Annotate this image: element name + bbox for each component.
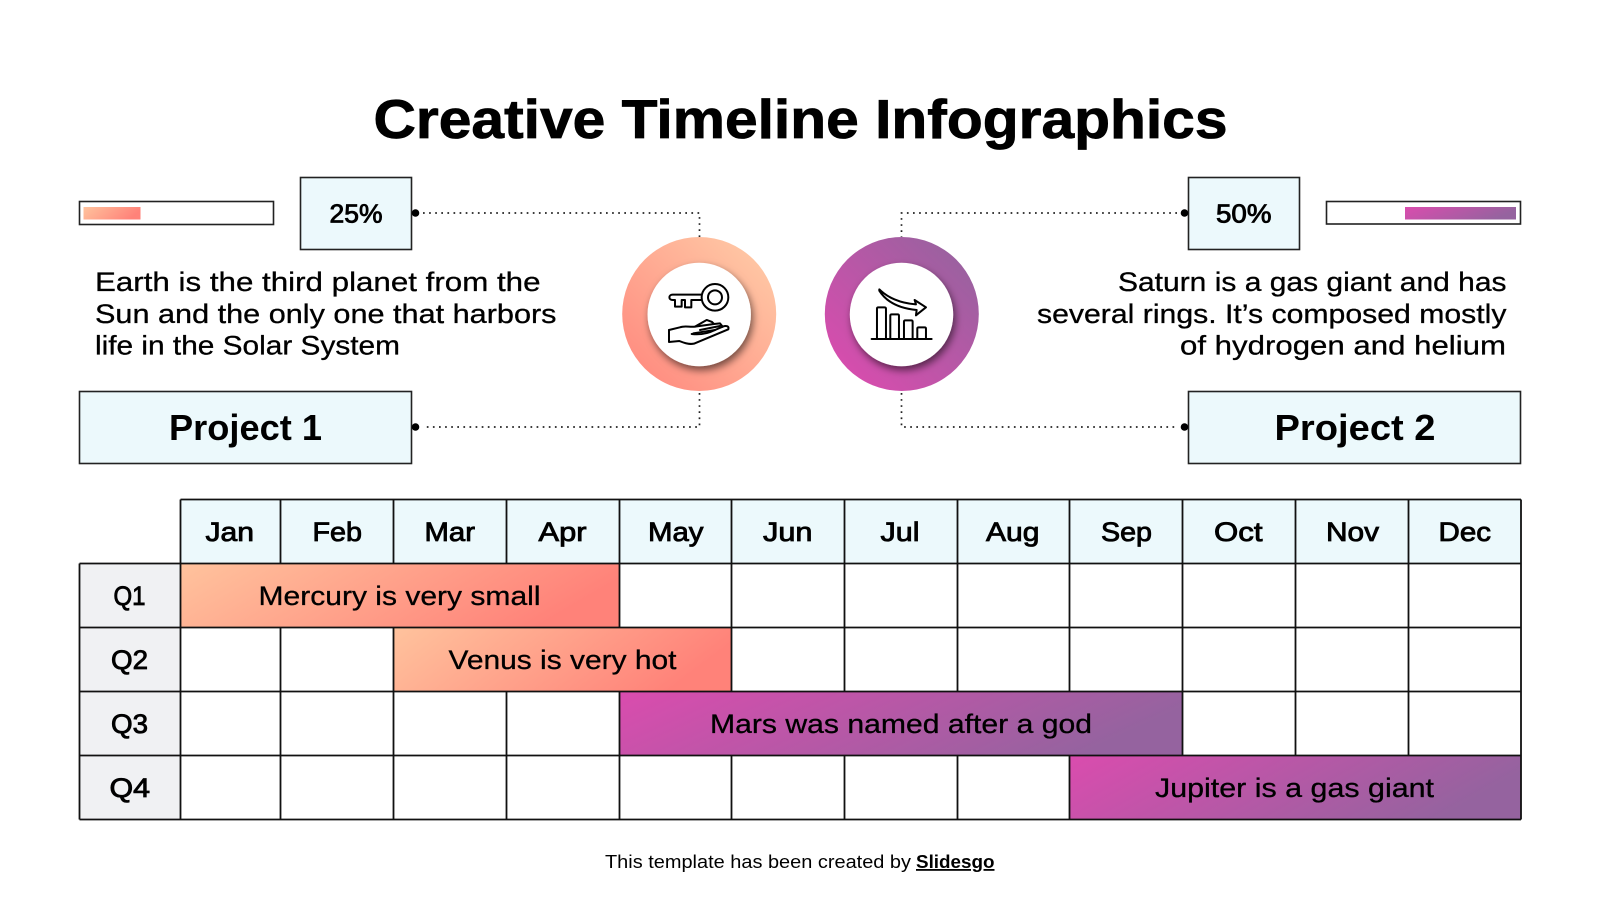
percentage box: 50%: 50% <box>1216 198 1272 228</box>
connector: project 2 to icon <box>902 209 1188 431</box>
footer credit: Slidesgo <box>916 852 995 872</box>
progress bar: 50% <box>1326 202 1520 224</box>
month labels: Aug <box>986 517 1040 547</box>
icon: chart ring <box>825 237 979 391</box>
bar: Venus: Venus is very hot <box>448 645 677 675</box>
heading box: Project 1: Project 1 <box>169 407 322 448</box>
month labels: Jul <box>880 517 920 547</box>
progress bar: 25% <box>80 202 274 224</box>
month labels: Jun <box>763 517 812 547</box>
text block: Earth description: life in the Solar System <box>95 330 400 360</box>
month labels: Nov <box>1326 517 1380 547</box>
month labels: Sep <box>1101 517 1152 547</box>
panel: project 1 <box>80 178 776 464</box>
heading box: Project 2: Project 2 <box>1274 407 1436 448</box>
connector: project 1 to icon <box>412 209 700 431</box>
footer credit: This template has been created by <box>605 852 911 872</box>
bar: Mars <box>620 692 1182 756</box>
text block: Saturn description: Saturn is a gas giant and has <box>1118 267 1506 297</box>
header cells background <box>180 500 1521 564</box>
month labels: Feb <box>312 517 362 547</box>
month labels: Mar <box>424 517 475 547</box>
heading box: Project 2 <box>1188 392 1520 464</box>
quarter labels: Q1 <box>114 581 146 611</box>
text block: Earth description <box>95 267 556 360</box>
text block: Saturn description <box>1037 267 1507 360</box>
quarter labels: Q3 <box>111 709 148 739</box>
percentage box: 50% <box>1188 178 1300 250</box>
text block: Saturn description: of hydrogen and helium <box>1180 330 1506 360</box>
bar: Jupiter <box>1070 756 1521 820</box>
text block: Earth description: Earth is the third planet from the <box>95 267 540 297</box>
text block: Saturn description: several rings. It’s composed mostly <box>1037 299 1507 329</box>
icon: key in hand <box>669 284 729 344</box>
month labels: Apr <box>538 517 586 547</box>
bar: Jupiter: Jupiter is a gas giant <box>1155 773 1435 803</box>
month labels: Oct <box>1214 517 1263 547</box>
icon: declining bar chart <box>872 289 932 339</box>
icon: key and hand ring <box>622 237 776 391</box>
quarter cells background <box>80 564 180 820</box>
gantt chart <box>80 500 1521 820</box>
month labels: May <box>648 517 704 547</box>
bar: Venus <box>394 628 732 692</box>
quarter labels: Q2 <box>111 645 148 675</box>
title: Creative Timeline Infographics <box>374 88 1228 150</box>
panel: project 2 <box>825 178 1520 464</box>
quarter labels <box>110 581 150 803</box>
bar: Mars: Mars was named after a god <box>710 709 1092 739</box>
heading box: Project 1 <box>80 392 412 464</box>
percentage box: 25% <box>300 178 412 250</box>
percentage box: 25%: 25% <box>330 198 382 228</box>
month labels: Jan <box>206 517 254 547</box>
quarter labels: Q4 <box>110 773 150 803</box>
month labels <box>206 517 1491 547</box>
text block: Earth description: Sun and the only one that harbors <box>95 299 556 329</box>
bar: Mercury <box>180 564 620 628</box>
bar: Mercury: Mercury is very small <box>258 581 540 611</box>
month labels: Dec <box>1438 517 1491 547</box>
